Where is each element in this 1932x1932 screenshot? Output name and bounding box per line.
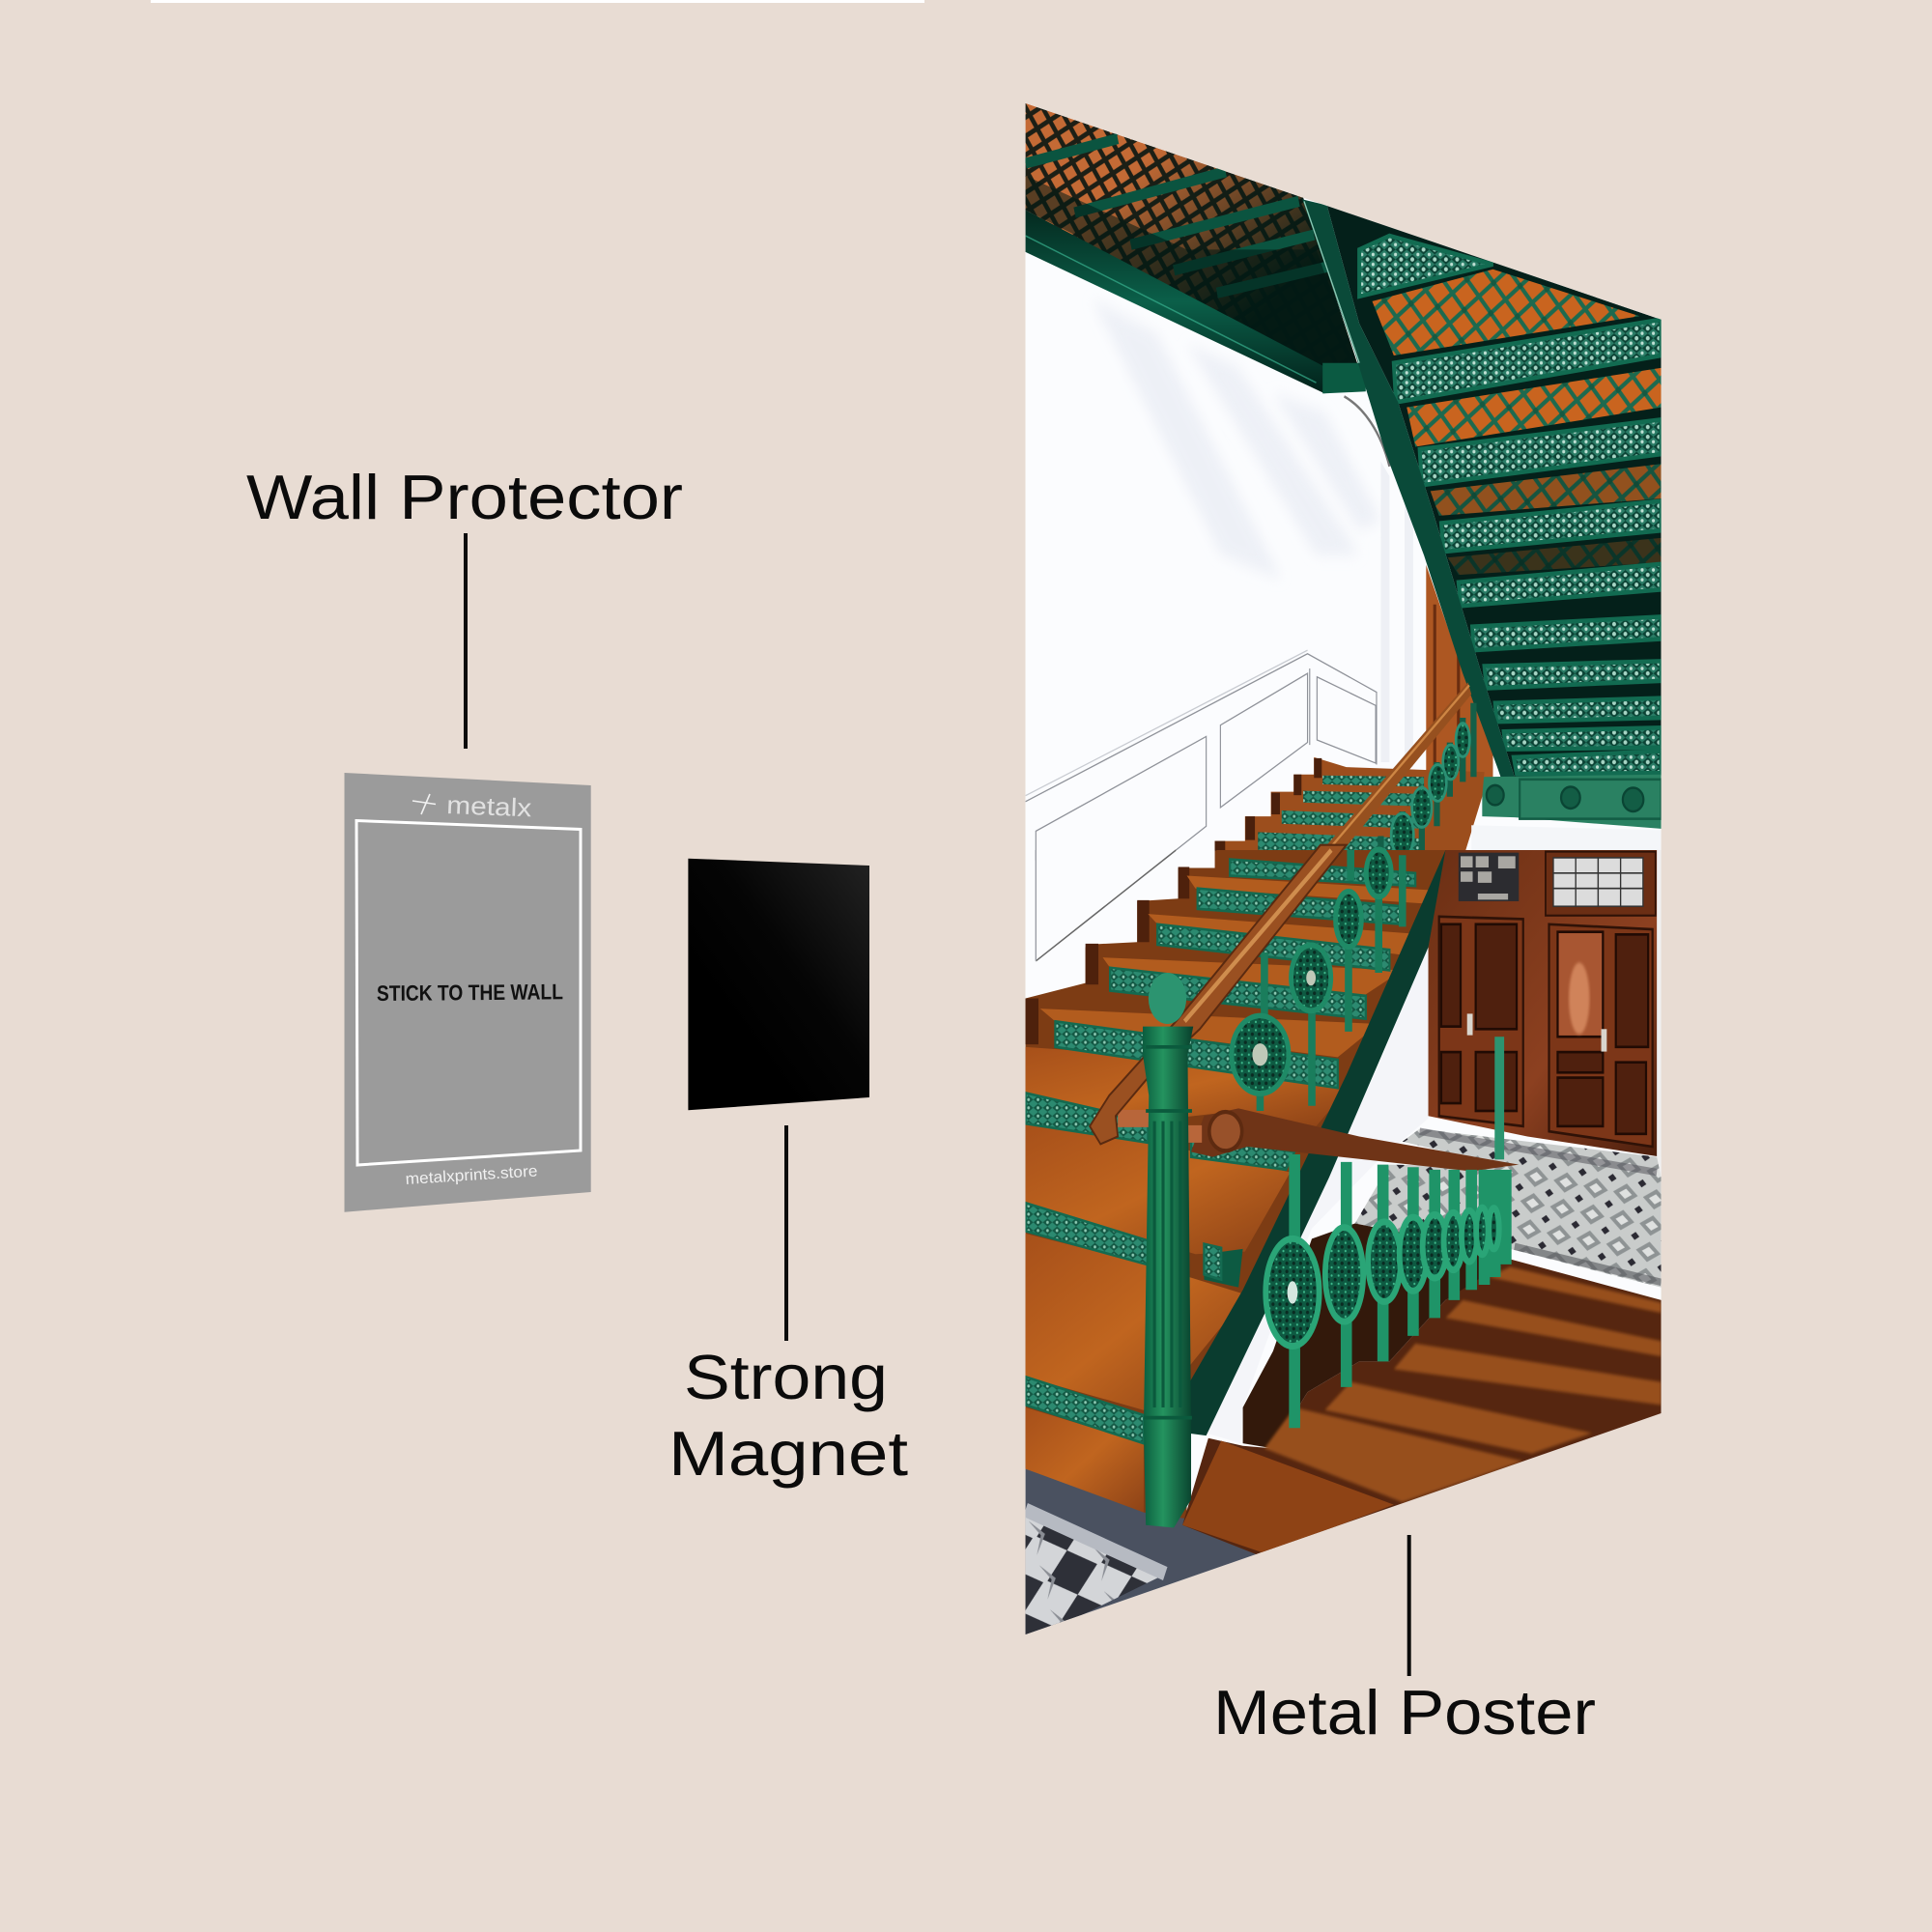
heading: Wall Protector: Wall Protector (246, 462, 683, 532)
ceiling lattice (1026, 103, 1364, 383)
leader line: metal poster (1407, 1535, 1411, 1676)
label: website: metalxprints.store (405, 1162, 538, 1188)
lower baluster row (1294, 1154, 1506, 1428)
icon: metalx logo mark (412, 794, 436, 814)
wall light rays (1103, 310, 1375, 571)
upper balusters in lower section (1260, 850, 1403, 1111)
handrail, upper (1327, 682, 1472, 850)
second handrail (1191, 1108, 1519, 1171)
underside of upper flight (1327, 205, 1662, 777)
panel: black strong magnet (688, 859, 869, 1110)
heading: Metal Poster: Metal Poster (1213, 1677, 1596, 1747)
heading: Strong Magnet: Magnet (668, 1418, 908, 1489)
lower flight, top section (1215, 757, 1485, 860)
wall cut-outs (1026, 861, 1179, 999)
step gratings (1026, 860, 1415, 1443)
green beam (1026, 211, 1324, 393)
panel: wall protector sheet (344, 773, 591, 1212)
wainscot lines (1026, 649, 1378, 860)
transom windows (1546, 852, 1656, 916)
leader line: strong magnet (784, 1125, 788, 1341)
leader line: wall protector (464, 533, 468, 749)
white door frame edge (1657, 850, 1662, 1176)
top white sliver (151, 0, 924, 3)
stair base (1026, 850, 1463, 1525)
small green post (1494, 1037, 1504, 1159)
column highlight (1380, 462, 1389, 762)
heading: Strong Magnet (668, 1342, 908, 1489)
panel: metal poster staircase illustration (1025, 97, 1662, 1643)
gray floor (1026, 1469, 1264, 1643)
stair stringer (1187, 850, 1463, 1435)
newel finial (1149, 973, 1186, 1024)
balusters, upper (1380, 703, 1473, 860)
doors (1429, 850, 1662, 1157)
upper half of poster (1026, 103, 1662, 860)
lower wall band (1471, 825, 1474, 833)
main handrail (1090, 845, 1347, 1144)
lattice sections (1373, 270, 1662, 446)
newel post (1143, 1027, 1193, 1527)
logo text: metalx: metalx (446, 790, 532, 822)
dark void behind lower balusters (1243, 1223, 1510, 1448)
stringer (1302, 199, 1515, 817)
lower half of poster (1026, 845, 1662, 1643)
wood treads (1040, 875, 1445, 1057)
tile floor (1355, 1129, 1662, 1288)
door behind stairs (1426, 565, 1493, 780)
label: stick to the wall: STICK TO THE WALL (377, 980, 563, 1006)
green plinth (1482, 775, 1662, 829)
wood risers (1026, 867, 1189, 1044)
white wall under stairs (1207, 945, 1429, 1443)
heading: Strong Magnet: Strong (684, 1342, 888, 1412)
step gratings (1359, 236, 1662, 774)
lower wood steps (1182, 1260, 1662, 1556)
